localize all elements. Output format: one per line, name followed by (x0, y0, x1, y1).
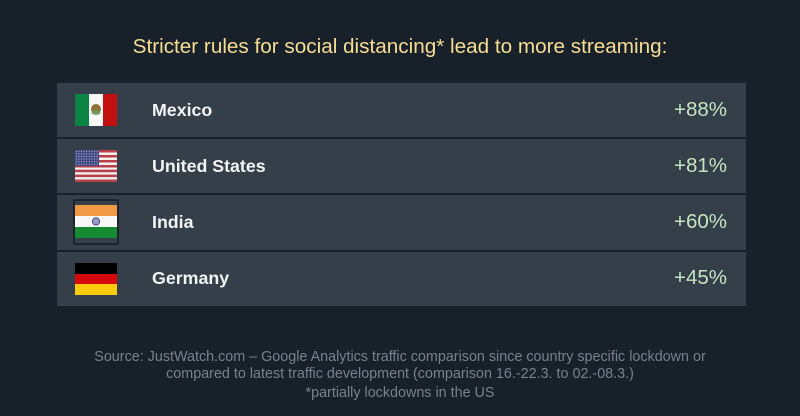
icon: India flag (73, 199, 119, 245)
percentage value: +45% (674, 266, 727, 289)
country name: India (152, 212, 194, 232)
panel: Mexico row (57, 83, 746, 137)
panel: India row (57, 195, 746, 250)
country name: Mexico (152, 100, 212, 120)
country name: Germany (152, 268, 229, 288)
icon: Germany flag (75, 263, 117, 295)
panel: Germany row (57, 252, 746, 306)
panel: United States row (57, 139, 746, 193)
icon: US flag (75, 150, 117, 182)
source footnote: *partially lockdowns in the US (306, 385, 494, 401)
percentage value: +81% (674, 154, 727, 177)
percentage value: +88% (674, 98, 727, 121)
source footnote (94, 349, 706, 401)
title: Stricter rules for social distancing* lead to more streaming: (133, 35, 667, 58)
percentage value: +60% (674, 210, 727, 233)
country name: United States (152, 156, 266, 176)
icon: Mexico flag (75, 94, 117, 126)
source footnote: Source: JustWatch.com – Google Analytics traffic comparison since country specific lockdown or (94, 349, 706, 365)
source footnote: compared to latest traffic development (comparison 16.-22.3. to 02.-08.3.) (166, 366, 634, 382)
